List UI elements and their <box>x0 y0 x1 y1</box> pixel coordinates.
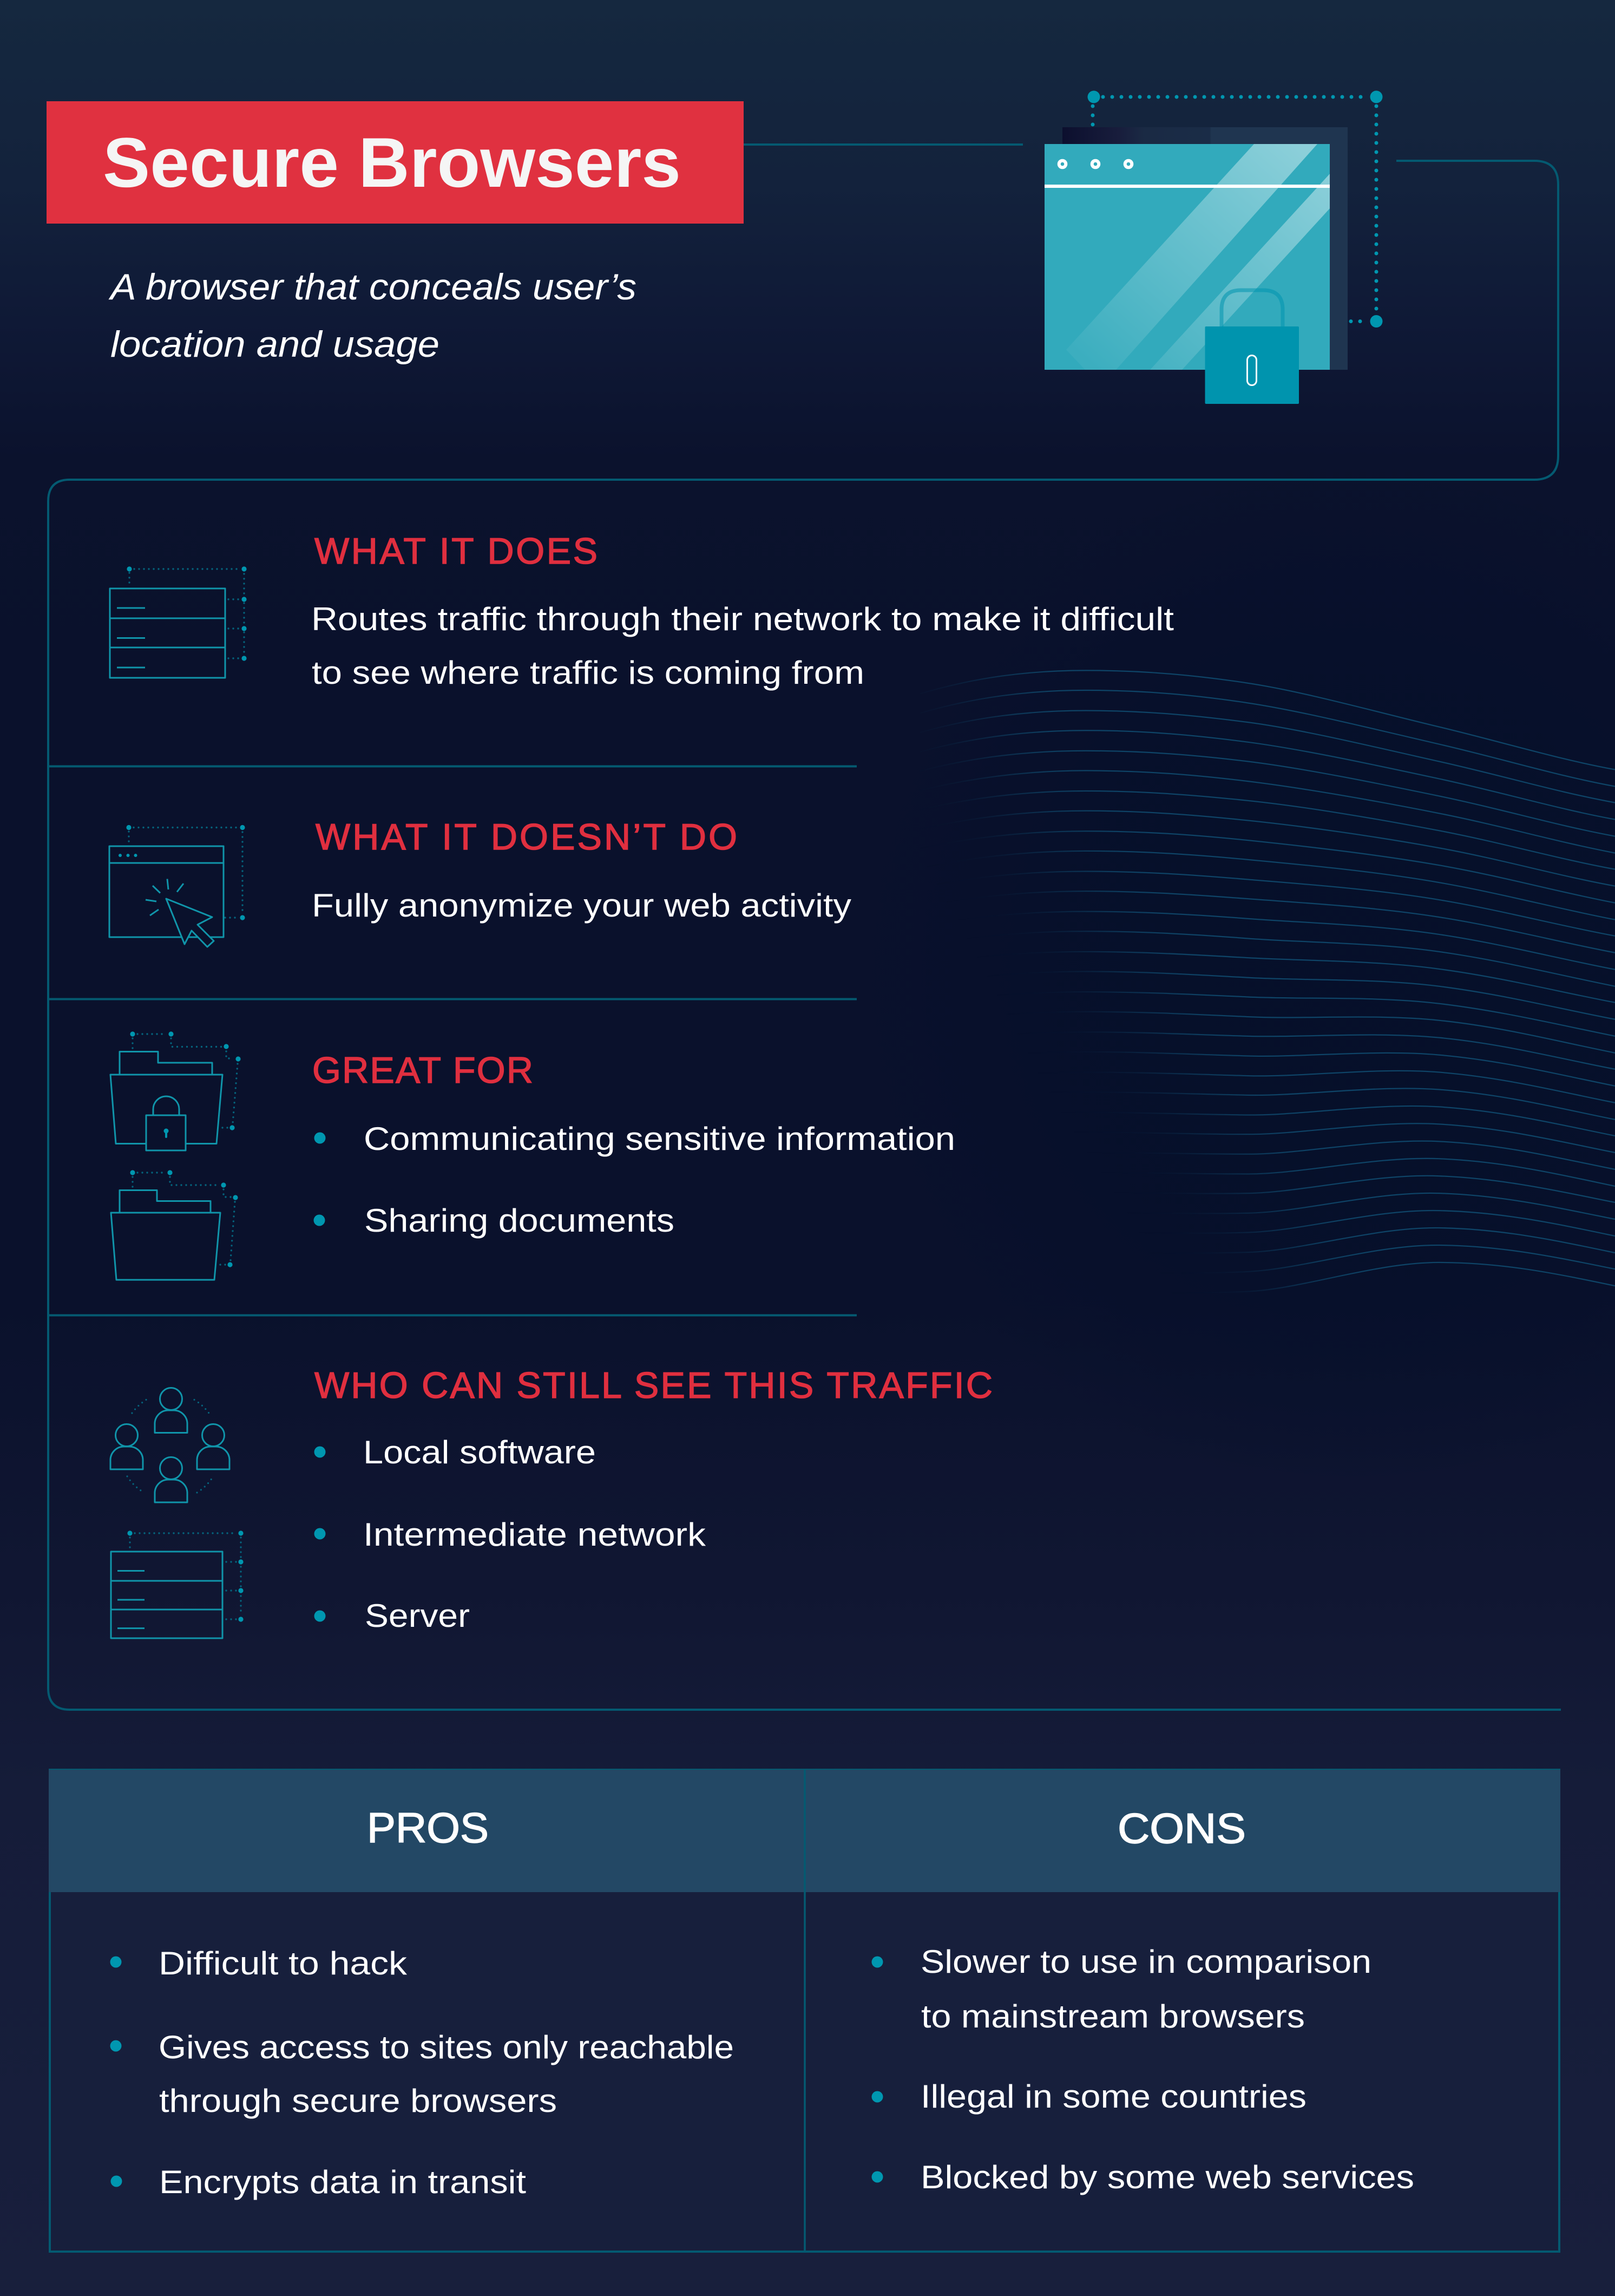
icon: locked folder <box>110 1031 241 1150</box>
pros and cons table <box>49 1770 1560 2252</box>
column: cons: Blocked by some web services <box>921 2159 1414 2195</box>
list: who can see <box>314 1434 706 1634</box>
column: cons: Illegal in some countries <box>921 2078 1307 2115</box>
list: who can see: Local software <box>363 1434 596 1470</box>
list: great for <box>314 1121 955 1239</box>
section: who can still see this traffic <box>110 1365 993 1638</box>
column: pros: Gives access to sites only reachable <box>159 2029 734 2065</box>
table frame <box>49 1770 1560 2252</box>
heading: who can still see this traffic: WHO CAN STILL SEE THIS TRAFFIC <box>314 1365 993 1406</box>
subtitle <box>108 266 636 365</box>
section: what it doesn't do <box>109 816 851 947</box>
icon: browser with cursor <box>109 825 245 947</box>
list: who can see: Server <box>365 1598 470 1634</box>
column: cons: to mainstream browsers <box>921 1998 1305 2035</box>
column: cons <box>871 1804 1414 2195</box>
heading: great for: GREAT FOR <box>312 1050 533 1091</box>
connector line from title <box>744 143 1023 146</box>
description: what it doesn't do: Fully anonymize your web activity <box>312 887 851 924</box>
heading: what it doesn't do: WHAT IT DOESN’T DO <box>316 816 737 858</box>
column: pros: Difficult to hack <box>159 1945 408 1981</box>
list: great for: Sharing documents <box>364 1202 674 1239</box>
description: what it does: Routes traffic through their network to make it difficult <box>311 601 1174 637</box>
icon: group of people <box>110 1388 229 1502</box>
icon: server stack <box>110 566 247 678</box>
section: what it does <box>110 531 1174 691</box>
column: pros: through secure browsers <box>159 2083 557 2119</box>
title banner <box>47 101 744 224</box>
title banner: Secure Browsers <box>103 123 681 202</box>
icon: server stack <box>111 1530 244 1638</box>
subtitle: A browser that conceals user’s <box>108 266 636 308</box>
subtitle: location and usage <box>110 324 439 365</box>
section: great for <box>110 1031 955 1280</box>
column: pros: PROS <box>367 1804 489 1852</box>
column: pros <box>110 1804 734 2200</box>
description: what it does: to see where traffic is coming from <box>312 655 864 691</box>
heading: what it does: WHAT IT DOES <box>314 531 598 572</box>
main panel outline <box>48 161 1561 1710</box>
list: great for: Communicating sensitive information <box>364 1121 955 1157</box>
list: who can see: Intermediate network <box>363 1516 706 1553</box>
column: cons: CONS <box>1118 1804 1246 1852</box>
icon: browser with padlock <box>1045 91 1382 404</box>
column: pros: Encrypts data in transit <box>159 2164 526 2200</box>
icon: folder <box>111 1170 238 1280</box>
column: cons: Slower to use in comparison <box>921 1944 1371 1980</box>
wave lines decoration <box>920 670 1615 1294</box>
dark glow behind wave <box>758 379 1615 1570</box>
description: what it does <box>311 601 1174 691</box>
